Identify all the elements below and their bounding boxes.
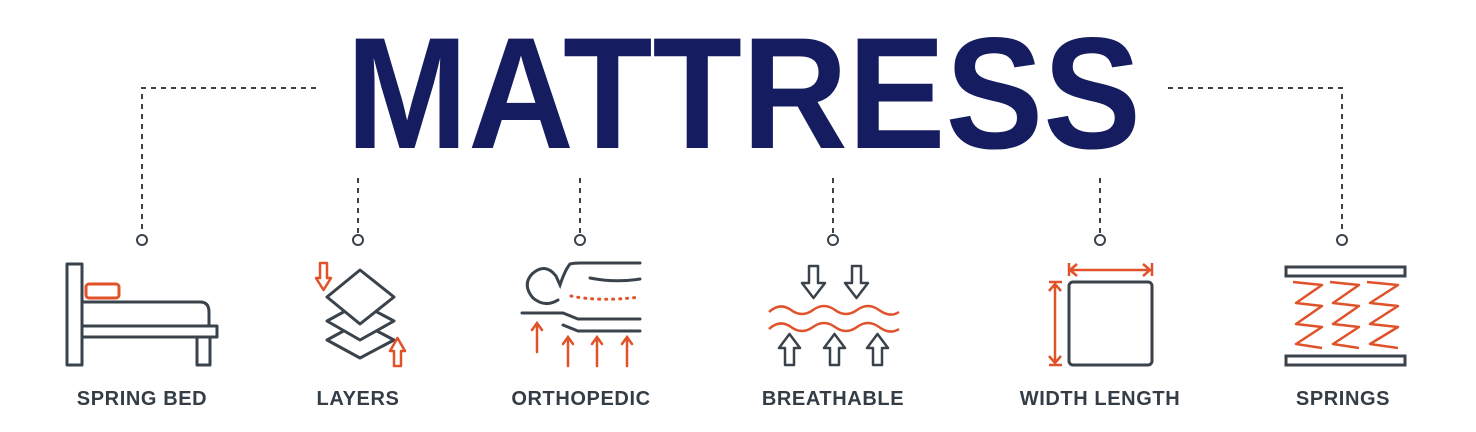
icon: orthopedic — [522, 263, 640, 366]
labels: LAYERS — [317, 388, 399, 410]
title: MATTRESS — [346, 4, 1141, 182]
labels: BREATHABLE — [762, 388, 904, 410]
labels: SPRINGS — [1296, 388, 1390, 410]
icon: spring bed — [67, 264, 217, 365]
connector lines — [142, 88, 1342, 233]
icon: width length — [1049, 263, 1152, 365]
labels: ORTHOPEDIC — [511, 388, 651, 410]
icon: layers — [316, 263, 405, 366]
connector circles — [137, 235, 1347, 245]
labels: SPRING BED — [77, 388, 207, 410]
icon: springs — [1286, 267, 1405, 365]
icon: breathable — [769, 266, 899, 365]
labels: WIDTH LENGTH — [1020, 388, 1180, 410]
labels — [77, 388, 1390, 410]
